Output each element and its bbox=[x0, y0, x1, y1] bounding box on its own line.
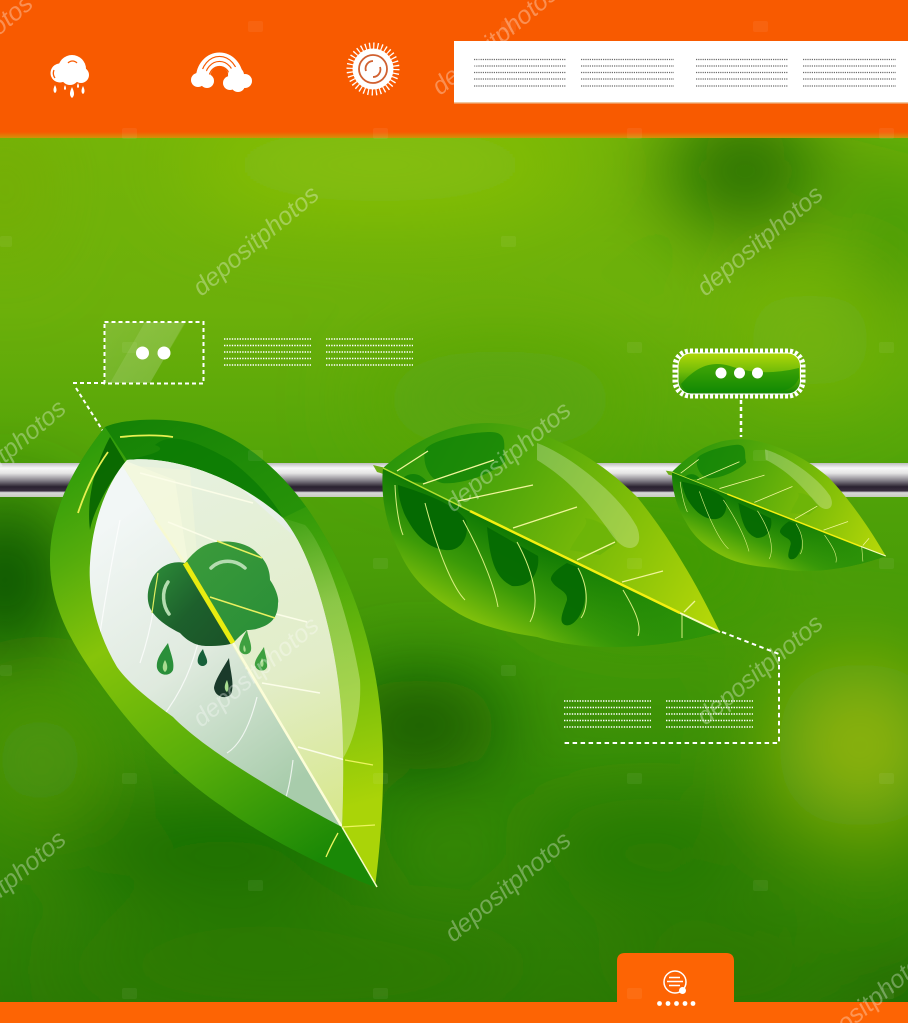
dots bbox=[716, 368, 763, 378]
vein and tip details bbox=[342, 827, 377, 887]
watermarks: depositphotos bbox=[187, 180, 324, 302]
watermarks: depositphotos bbox=[439, 396, 576, 518]
right small leaf bbox=[664, 428, 887, 582]
big leaf with glass window bbox=[40, 420, 400, 890]
leader line bbox=[73, 383, 118, 455]
dots bbox=[136, 346, 170, 360]
callout: upper left dashed box bbox=[73, 322, 204, 455]
watermarks: depositphotos bbox=[691, 609, 828, 731]
icon: rainbow with clouds bbox=[191, 56, 252, 92]
text lines: upper left bbox=[224, 339, 413, 365]
leader line: lower right bbox=[564, 632, 779, 743]
metal tube bbox=[0, 463, 908, 497]
text lines: header columns bbox=[474, 60, 896, 86]
watermarks: depositphotos bbox=[187, 611, 324, 733]
footer bar with tab bbox=[0, 953, 908, 1023]
leader line bbox=[740, 400, 742, 437]
header bar bbox=[0, 0, 908, 138]
glass window bbox=[90, 459, 344, 827]
middle leaf bbox=[373, 423, 720, 647]
watermarks: depositphotos bbox=[439, 826, 576, 948]
watermarks: depositphotos bbox=[691, 180, 828, 302]
callout: green pill bbox=[675, 351, 803, 437]
icon: sun bbox=[351, 47, 395, 91]
text lines: lower right bbox=[564, 701, 753, 727]
icon: chat bubble bbox=[664, 971, 686, 994]
icon: rain cloud bbox=[50, 55, 89, 98]
panel: white text box bbox=[454, 41, 908, 104]
dots bbox=[657, 1001, 695, 1006]
rain drops bbox=[157, 630, 267, 697]
icon: glass rain cloud bbox=[148, 541, 278, 697]
